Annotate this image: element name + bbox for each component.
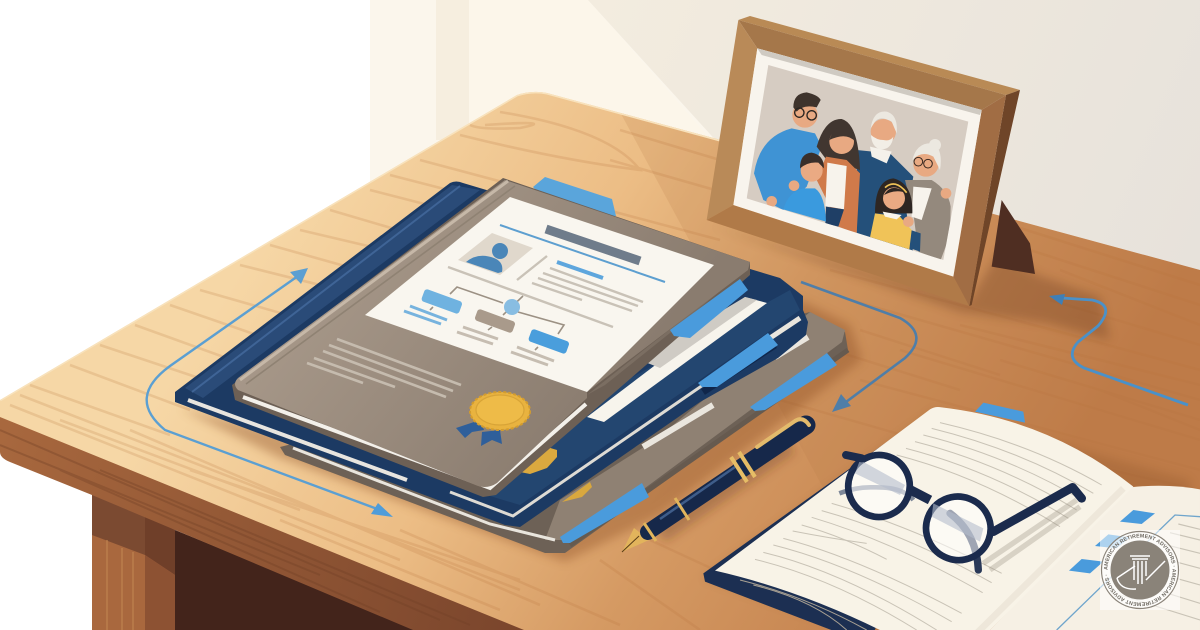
gold seal peek upper (520, 447, 557, 474)
photo mat (733, 48, 982, 277)
logo column emblem (1117, 556, 1165, 589)
lower folder (280, 312, 848, 553)
gold seal with ribbon (456, 392, 530, 446)
frame bottom rail (707, 205, 969, 306)
blue tab top (533, 177, 616, 216)
blue tab middle (698, 333, 778, 387)
fountain pen (622, 419, 809, 552)
blue tab upper (670, 279, 748, 338)
glasses shadow (983, 500, 1080, 570)
cover text lines (307, 339, 461, 397)
navy binder (175, 182, 808, 527)
notebook shadow (703, 410, 1200, 630)
folder cover (235, 180, 750, 487)
notebook bookmark tab (975, 403, 1025, 423)
frame left rail (707, 20, 757, 220)
frame top rail (738, 20, 1006, 110)
notebook ruled lines (755, 423, 1102, 630)
family photo frame (707, 16, 1035, 306)
arrow: left loop (147, 268, 393, 517)
seal logo: American Retirement Advisors (1100, 530, 1180, 610)
left page (715, 407, 1133, 630)
desk leg and underside (92, 490, 420, 630)
blue tab bottom (560, 483, 649, 543)
document text lines (448, 256, 643, 327)
mother (817, 119, 860, 233)
grandmother (905, 139, 951, 260)
folder stack shadow (180, 300, 862, 562)
logo ring text: AMERICAN RETIREMENT ADVISORS · AMERICAN RETIREMENT ADVISORS · (1104, 534, 1176, 606)
father (754, 92, 822, 210)
arrow: right of stack (801, 282, 916, 412)
glasses (839, 446, 1082, 570)
blue tab lower right (750, 353, 837, 411)
frame stand (992, 200, 1035, 274)
gold seal peek lower (562, 482, 592, 502)
right page (987, 486, 1200, 630)
frame right rail (953, 95, 1006, 306)
document page (365, 197, 714, 392)
document title bar (546, 229, 640, 261)
grandfather (857, 112, 913, 253)
top folder (232, 178, 750, 497)
arrow: far right squiggle (1049, 294, 1188, 405)
document blue rule (500, 225, 665, 282)
girl (870, 178, 914, 249)
org chart (404, 287, 570, 365)
document portrait (458, 233, 533, 275)
open notebook (703, 403, 1200, 630)
photo with family (746, 65, 968, 260)
desk front edge (0, 415, 530, 630)
right page contents (1057, 510, 1200, 630)
frame shadow on desk (710, 225, 1110, 340)
boy (783, 153, 826, 222)
